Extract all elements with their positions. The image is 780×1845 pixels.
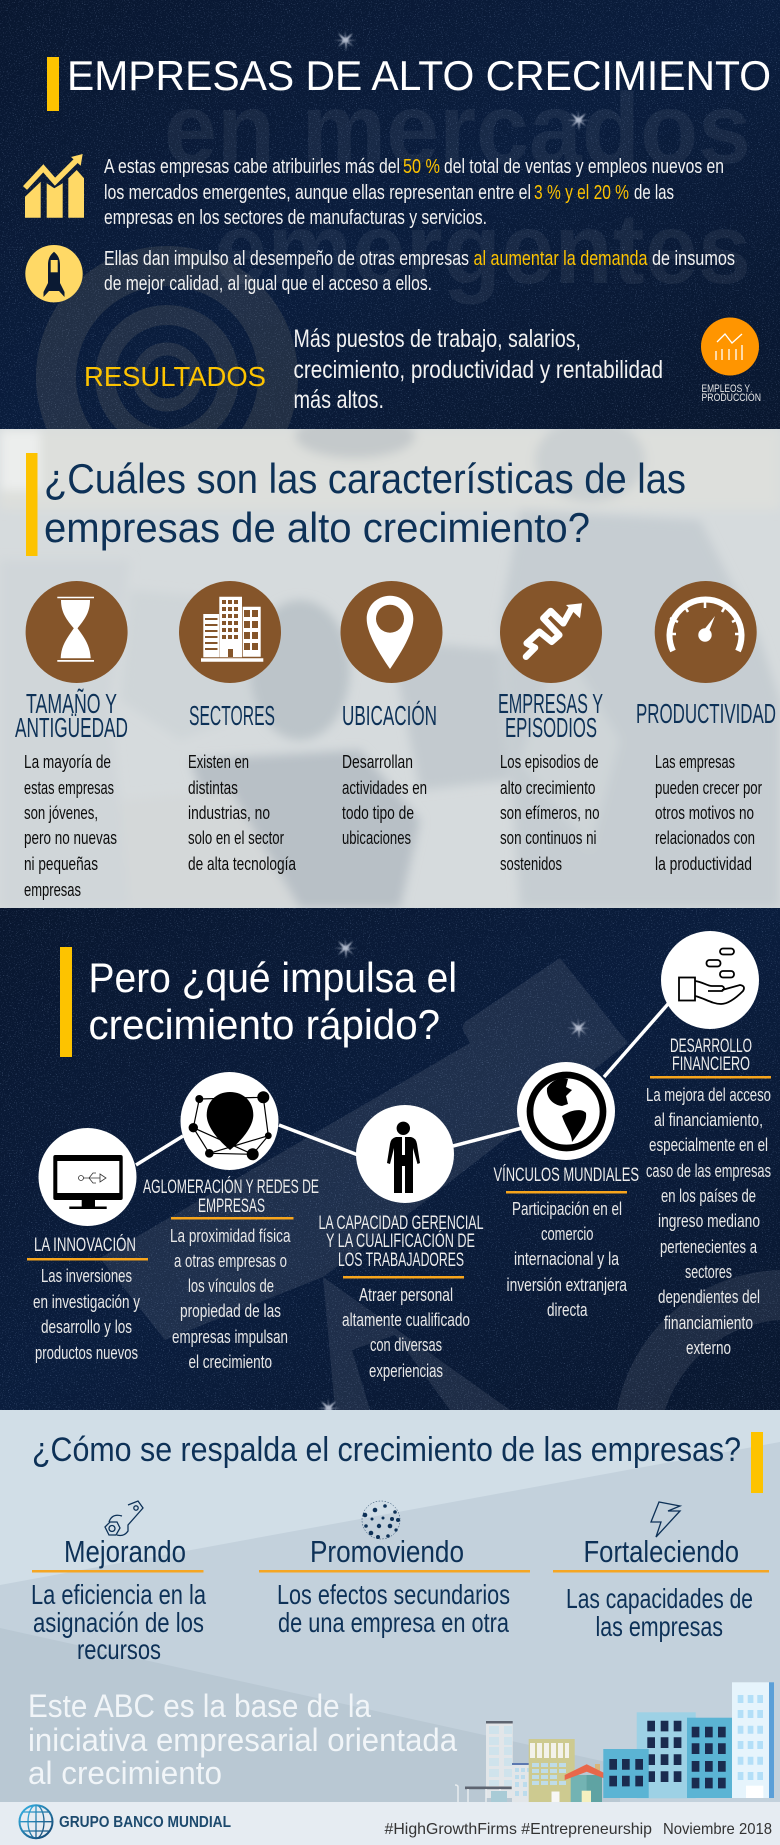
blue mid building <box>687 1718 732 1798</box>
text: alto crecimiento <box>500 777 596 798</box>
text: productos nuevos <box>35 1342 138 1363</box>
paragraph: demand: Ellas dan impulso al desempeño de otras empresas <box>104 248 469 270</box>
text: sectores <box>685 1261 732 1282</box>
column: promoting <box>259 1501 530 1638</box>
illustration: city skyline <box>455 1682 774 1802</box>
text: Los episodios de <box>500 751 598 772</box>
icon: gauge <box>655 581 757 683</box>
text: con diversas <box>370 1334 442 1355</box>
closing statement: Este ABC es la base de la <box>28 1688 371 1724</box>
paragraph: share of sales: 3 % y el 20 % <box>534 182 629 204</box>
text: La eficiencia en la <box>31 1579 206 1610</box>
heading: ¿Cuáles son las características de las <box>44 455 686 502</box>
text: experiencias <box>369 1360 443 1381</box>
text: son continuos ni <box>500 827 596 848</box>
text: las empresas <box>596 1611 723 1642</box>
closing statement: al crecimiento <box>28 1755 222 1791</box>
beige building <box>529 1739 575 1802</box>
title: SECTORES <box>189 700 275 731</box>
light blue tower <box>637 1712 696 1798</box>
title <box>498 688 603 743</box>
text: altamente cualificado <box>342 1309 470 1330</box>
paragraph: share of sales <box>104 156 724 229</box>
text: el crecimiento <box>188 1351 272 1372</box>
title <box>670 1035 752 1075</box>
text: asignación de los <box>33 1607 204 1638</box>
text: comercio <box>541 1223 594 1244</box>
text: Atraer personal <box>359 1284 453 1305</box>
logo: World Bank globe <box>20 1805 52 1838</box>
background rings <box>56 266 278 488</box>
heading: Pero ¿qué impulsa el <box>88 954 457 1001</box>
text <box>170 1225 291 1372</box>
hashtags: #HighGrowthFirms #Entrepreneurship <box>384 1821 652 1838</box>
text: los vínculos de <box>188 1275 274 1296</box>
text <box>646 1084 771 1358</box>
paragraph: demand: al aumentar la demanda <box>474 248 648 270</box>
rule <box>343 1276 464 1278</box>
text: Participación en el <box>512 1198 622 1219</box>
text: son jóvenes, <box>24 802 98 823</box>
icon: jobs and production <box>701 318 761 404</box>
text <box>277 1579 510 1638</box>
text: estas empresas <box>24 777 114 798</box>
text: financiamiento <box>664 1312 753 1333</box>
text: son efímeros, no <box>500 802 600 823</box>
rule <box>506 1191 627 1194</box>
icon: hourglass <box>26 581 128 683</box>
text: internacional y la <box>514 1248 620 1269</box>
text: todo tipo de <box>342 802 414 823</box>
column: sectors <box>179 581 297 874</box>
column: improving <box>31 1501 206 1665</box>
text: externo <box>686 1337 731 1358</box>
watermark text: emergentes <box>214 193 751 305</box>
title: ANTIGÜEDAD <box>15 712 128 743</box>
icon: growth chart <box>25 154 84 218</box>
rule <box>171 1217 294 1220</box>
step: global links <box>494 1062 639 1320</box>
title: Fortaleciendo <box>584 1534 739 1569</box>
text: Las empresas <box>655 751 735 772</box>
text: distintas <box>188 777 238 798</box>
text: Los efectos secundarios <box>277 1579 510 1610</box>
text <box>655 751 762 874</box>
step: financial development <box>646 931 771 1358</box>
results text <box>294 325 663 414</box>
results label: RESULTADOS <box>84 361 266 392</box>
icon: monitor <box>38 1128 136 1226</box>
title <box>143 1175 319 1217</box>
text: recursos <box>77 1634 161 1665</box>
text: inversión extranjera <box>506 1274 628 1295</box>
rule <box>553 1570 769 1572</box>
icon: dot network <box>362 1501 400 1539</box>
text <box>566 1583 753 1642</box>
step: agglomeration <box>143 1072 319 1372</box>
text <box>500 751 600 874</box>
rule <box>32 1570 204 1572</box>
title: Y LA CUALIFICACIÓN DE <box>326 1229 475 1252</box>
blue low building <box>603 1749 649 1798</box>
connecting line <box>136 1004 668 1165</box>
rocket silhouette <box>100 958 780 1410</box>
closing statement: iniciativa empresarial orientada <box>28 1722 457 1758</box>
text <box>31 1579 206 1665</box>
paragraph: share of sales: A estas empresas cabe atribuirles más del <box>104 156 400 178</box>
title: LA INNOVACIÓN <box>34 1233 136 1256</box>
text: ubicaciones <box>342 827 411 848</box>
icon: rocket <box>25 245 83 302</box>
text: a otras empresas o <box>174 1250 287 1271</box>
icon: jobs and production: EMPLEOS Y <box>702 383 750 395</box>
title: VÍNCULOS MUNDIALES <box>494 1163 639 1186</box>
text: empresas <box>24 879 81 900</box>
icon: map pin <box>340 581 442 683</box>
title: LOS TRABAJADORES <box>338 1249 464 1271</box>
text: de una empresa en otra <box>278 1607 509 1638</box>
results text: crecimiento, productividad y rentabilidad <box>294 356 663 384</box>
panel: characteristics <box>0 414 780 908</box>
title: EPISODIOS <box>505 712 597 743</box>
text: solo en el sector <box>188 827 284 848</box>
title: LA CAPACIDAD GERENCIAL <box>318 1212 484 1234</box>
paragraph: demand: de insumos <box>652 248 735 270</box>
rule <box>27 1258 148 1260</box>
paragraph: demand: de mejor calidad, al igual que el acceso a ellos. <box>104 273 432 295</box>
house <box>595 1764 600 1771</box>
panel: intro <box>0 0 780 488</box>
column: size and age <box>15 581 128 900</box>
paragraph: demand <box>104 248 735 295</box>
heading <box>44 455 686 551</box>
title: AGLOMERACIÓN Y REDES DE <box>143 1175 319 1198</box>
text <box>342 1284 470 1381</box>
text: directa <box>547 1299 588 1320</box>
pale tall tower <box>732 1682 769 1798</box>
icon: globe <box>517 1062 615 1160</box>
results text: Más puestos de trabajo, salarios, <box>294 325 581 353</box>
paragraph: share of sales: los mercados emergentes, aunque ellas representan entre el <box>104 182 531 204</box>
panel: support <box>0 1410 780 1802</box>
panel: drivers <box>0 908 780 1419</box>
stars <box>334 30 590 131</box>
text: Las inversiones <box>41 1265 132 1286</box>
column: location <box>340 581 442 848</box>
text: actividades en <box>342 777 427 798</box>
icon: lightning bolt <box>651 1502 680 1537</box>
title: EMPRESAS Y <box>498 688 603 719</box>
title: UBICACIÓN <box>342 700 437 731</box>
text: desarrollo y los <box>41 1316 132 1337</box>
text <box>33 1265 141 1363</box>
text: La proximidad física <box>170 1225 291 1246</box>
title <box>318 1212 484 1271</box>
paragraph: share of sales: de las <box>634 182 674 204</box>
results text: más altos. <box>294 386 384 414</box>
footer <box>0 1802 780 1845</box>
text: La mayoría de <box>24 751 111 772</box>
blurred photo background <box>0 414 780 908</box>
text <box>188 751 297 874</box>
date: Noviembre 2018 <box>663 1821 772 1838</box>
logo text: GRUPO BANCO MUNDIAL <box>59 1814 231 1831</box>
text: industrias, no <box>188 802 270 823</box>
heading accent bar <box>751 1432 763 1493</box>
canopy <box>465 1786 512 1789</box>
column: productivity <box>636 581 776 874</box>
text <box>342 751 427 848</box>
title: Promoviendo <box>310 1534 464 1569</box>
text: propiedad de las <box>180 1300 281 1321</box>
small building <box>512 1764 532 1802</box>
title: TAMAÑO Y <box>26 688 117 719</box>
icon: buildings <box>179 581 281 683</box>
closing statement <box>28 1688 457 1791</box>
paragraph: share of sales: 50 % <box>403 156 440 178</box>
heading accent bar <box>60 947 72 1057</box>
icon: hand with coins <box>661 931 759 1029</box>
stars <box>317 938 590 1419</box>
text: en investigación y <box>33 1291 141 1312</box>
text: ni pequeñas <box>24 853 98 874</box>
step: management <box>318 1105 484 1381</box>
step: innovation <box>27 1128 148 1363</box>
text: sostenidos <box>500 853 562 874</box>
text <box>506 1198 628 1320</box>
title: EMPRESAS <box>198 1195 265 1217</box>
icon: business person <box>356 1105 454 1203</box>
text: Desarrollan <box>342 751 413 772</box>
column: strengthening <box>553 1502 769 1642</box>
column: firms and episodes <box>498 581 603 874</box>
heading accent bar <box>26 453 38 556</box>
rule <box>259 1570 530 1572</box>
text: pero no nuevas <box>24 827 117 848</box>
watermark text <box>164 73 751 305</box>
grey tower <box>486 1723 513 1798</box>
icon: network pin <box>180 1072 278 1170</box>
text: empresas impulsan <box>172 1326 288 1347</box>
icon: wrench <box>105 1501 143 1536</box>
title accent bar <box>47 57 59 111</box>
text <box>24 751 117 900</box>
title <box>15 688 128 743</box>
rule <box>650 1076 771 1078</box>
heading: empresas de alto crecimiento? <box>44 504 590 551</box>
icon: jobs and production: PRODUCCIÓN <box>702 391 761 404</box>
watermark text: en mercados <box>164 73 751 185</box>
title: EMPRESAS DE ALTO CRECIMIENTO <box>67 52 771 99</box>
heading <box>88 954 457 1048</box>
icon: zigzag arrow <box>500 581 602 683</box>
text: de alta tecnología <box>188 853 297 874</box>
title: Mejorando <box>64 1534 186 1569</box>
paragraph: share of sales: empresas en los sectores de manufacturas y servicios. <box>104 207 487 229</box>
heading: crecimiento rápido? <box>88 1001 440 1048</box>
text: Existen en <box>188 751 249 772</box>
